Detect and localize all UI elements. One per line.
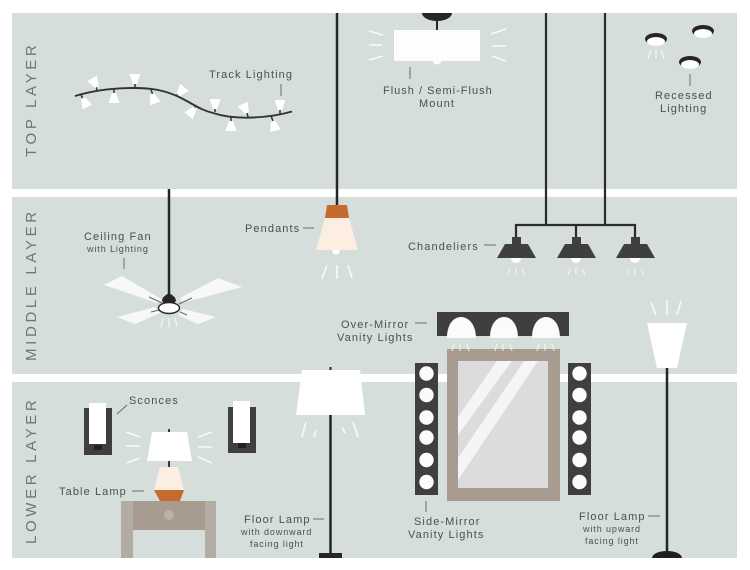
- panel: middle layer: [12, 197, 737, 374]
- heading: middle layer: MIDDLE LAYER: [23, 208, 40, 361]
- panel: top layer: [12, 13, 737, 189]
- label: flush mount: Flush / Semi-Flush: [383, 85, 493, 97]
- label: ceiling fan: [84, 231, 152, 269]
- icon: over-mirror vanity lights: [437, 312, 569, 351]
- icon: side table: [121, 501, 216, 558]
- icon: ceiling fan: [104, 189, 242, 327]
- label: floor lamp upward: Floor Lamp: [579, 511, 646, 523]
- label: over-mirror vanity lights: [337, 319, 427, 344]
- label: side-mirror vanity lights: [408, 501, 484, 541]
- label: floor lamp downward: with downward: [240, 527, 312, 537]
- icon: side-mirror vanity lights left: [415, 363, 438, 495]
- label: side-mirror vanity lights: Side-Mirror: [414, 516, 480, 528]
- icon: table lamp: [126, 429, 212, 501]
- label: floor lamp downward: [240, 514, 324, 549]
- icon: sconce left: [84, 403, 112, 455]
- label: sconces: [117, 395, 179, 414]
- icon: floor lamp downward: [296, 367, 365, 558]
- label: floor lamp downward: Floor Lamp: [244, 514, 311, 526]
- label: track lighting: Track Lighting: [209, 69, 293, 81]
- label: recessed lighting: Recessed: [655, 90, 713, 102]
- icon: chandelier: [497, 13, 655, 275]
- label: floor lamp upward: [579, 511, 660, 546]
- label: ceiling fan: with Lighting: [86, 244, 149, 254]
- label: over-mirror vanity lights: Vanity Lights: [337, 332, 413, 344]
- icon: floor lamp upward: [647, 300, 687, 558]
- label: floor lamp downward: facing light: [250, 539, 304, 549]
- label: side-mirror vanity lights: Vanity Lights: [408, 529, 484, 541]
- icon: flush mount: [369, 13, 506, 64]
- heading: top layer: TOP LAYER: [23, 42, 40, 157]
- heading: lower layer: LOWER LAYER: [23, 397, 40, 544]
- label: table lamp: Table Lamp: [59, 486, 127, 498]
- panel: lower layer: [12, 382, 737, 558]
- label: ceiling fan: Ceiling Fan: [84, 231, 152, 243]
- label: recessed lighting: Lighting: [660, 103, 707, 115]
- label: pendants: Pendants: [245, 223, 300, 235]
- icon: side-mirror vanity lights right: [568, 363, 591, 495]
- label: over-mirror vanity lights: Over-Mirror: [341, 319, 409, 331]
- label: floor lamp upward: with upward: [582, 524, 641, 534]
- icon: sconce right: [228, 401, 256, 453]
- icon: recessed lighting: [645, 25, 714, 69]
- label: flush mount: Mount: [419, 98, 455, 110]
- label: flush mount: [383, 67, 493, 110]
- label: track lighting: [209, 69, 293, 96]
- icon: pendant: [316, 13, 358, 279]
- icon: track lighting: [75, 74, 292, 132]
- label: chandeliers: Chandeliers: [408, 241, 479, 253]
- label: sconces: Sconces: [129, 395, 179, 407]
- icon: mirror: [447, 349, 560, 501]
- label: floor lamp upward: facing light: [585, 536, 639, 546]
- label: recessed lighting: [655, 74, 713, 115]
